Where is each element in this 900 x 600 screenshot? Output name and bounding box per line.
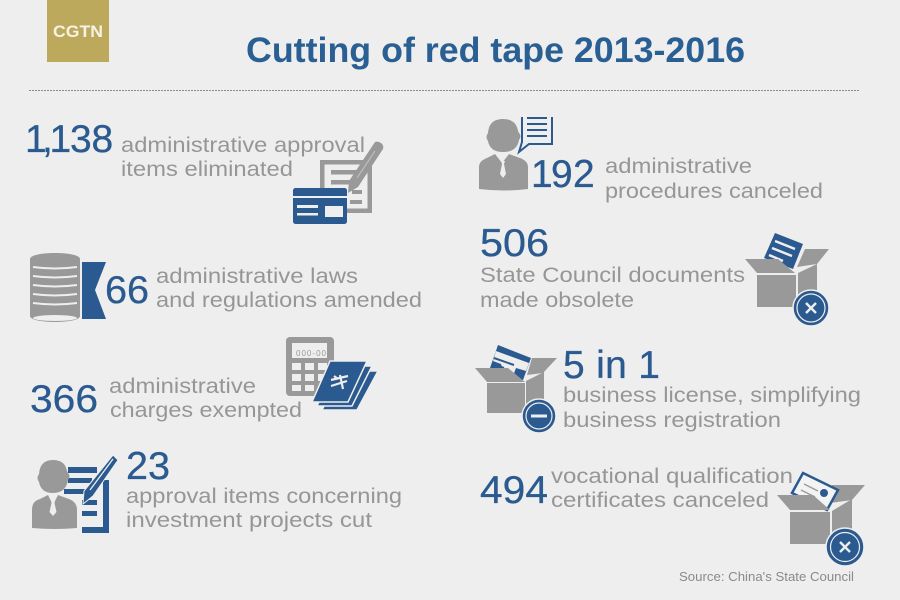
icon: box with certificate and cross <box>777 473 865 566</box>
source: Source: China's State Council <box>679 570 854 584</box>
text: laws and regulations: and regulations amended <box>156 288 422 312</box>
text: vocational qualification: vocational qualification <box>551 464 793 488</box>
icon: person with speech bubble <box>479 117 552 190</box>
text: vocational qualification: certificates canceled <box>551 488 769 512</box>
text: procedures canceled: administrative <box>605 154 752 178</box>
text: business license: business license, simplifying <box>563 383 861 407</box>
item: 1,138 approval items eliminated <box>25 118 383 224</box>
icon: person with form and pencil <box>32 455 118 533</box>
icon: document, pencil and card <box>293 142 383 224</box>
text: State Council documents <box>480 263 745 312</box>
text: approval items <box>121 133 365 181</box>
item: 366 charges exempted <box>30 337 378 422</box>
number: 5 in 1: 5 in 1 <box>563 344 660 387</box>
item: 494 vocational certificates <box>480 464 865 566</box>
text: approval items concerning: approval items concerning <box>126 484 402 508</box>
logo: CGTN: CGTN <box>53 22 103 41</box>
text: charges exempted: administrative <box>109 374 256 398</box>
item: 23 investment projects <box>32 445 402 533</box>
text: laws and regulations: administrative laws <box>156 264 358 288</box>
icon: box with document and cross <box>745 233 829 326</box>
icon: calculator and money notes: 000-00 <box>296 349 327 358</box>
number: 23: 23 <box>126 445 170 488</box>
text: approval items concerning: investment projects cut <box>126 508 372 532</box>
icon: calculator and money notes <box>286 337 378 410</box>
text: procedures canceled: procedures canceled <box>605 179 823 203</box>
text: State Council documents: State Council documents <box>480 263 745 287</box>
number: 506: 506 <box>480 222 549 265</box>
text: business license <box>563 383 861 432</box>
text: approval items concerning <box>126 484 402 532</box>
title: Cutting of red tape 2013-2016 <box>246 31 745 70</box>
text: vocational qualification <box>551 464 793 512</box>
number: 192: 192 <box>531 153 595 196</box>
item: 5 in 1 business license <box>475 344 861 433</box>
number: 494: 494 <box>480 469 548 512</box>
number: 66: 66 <box>105 269 149 312</box>
text: laws and regulations <box>156 264 422 312</box>
icon: box with card and minus <box>475 345 557 433</box>
item: 192 procedures canceled <box>479 117 823 203</box>
text: procedures canceled <box>605 154 823 203</box>
number: 366: 366 <box>30 378 98 421</box>
icon: book stack and ribbon <box>30 253 106 322</box>
text: approval items: items eliminated <box>121 157 293 181</box>
text: charges exempted <box>109 374 302 422</box>
item: 506 documents obsolete <box>480 222 829 326</box>
text: business license: business registration <box>563 408 781 432</box>
text: State Council documents: made obsolete <box>480 288 634 312</box>
text: approval items: administrative approval <box>121 133 365 157</box>
text: charges exempted: charges exempted <box>110 398 302 422</box>
number: 1,138: 1,138 <box>25 118 113 161</box>
logo: CGTN <box>47 0 109 62</box>
item: 66 laws and regulations amended <box>30 253 422 322</box>
